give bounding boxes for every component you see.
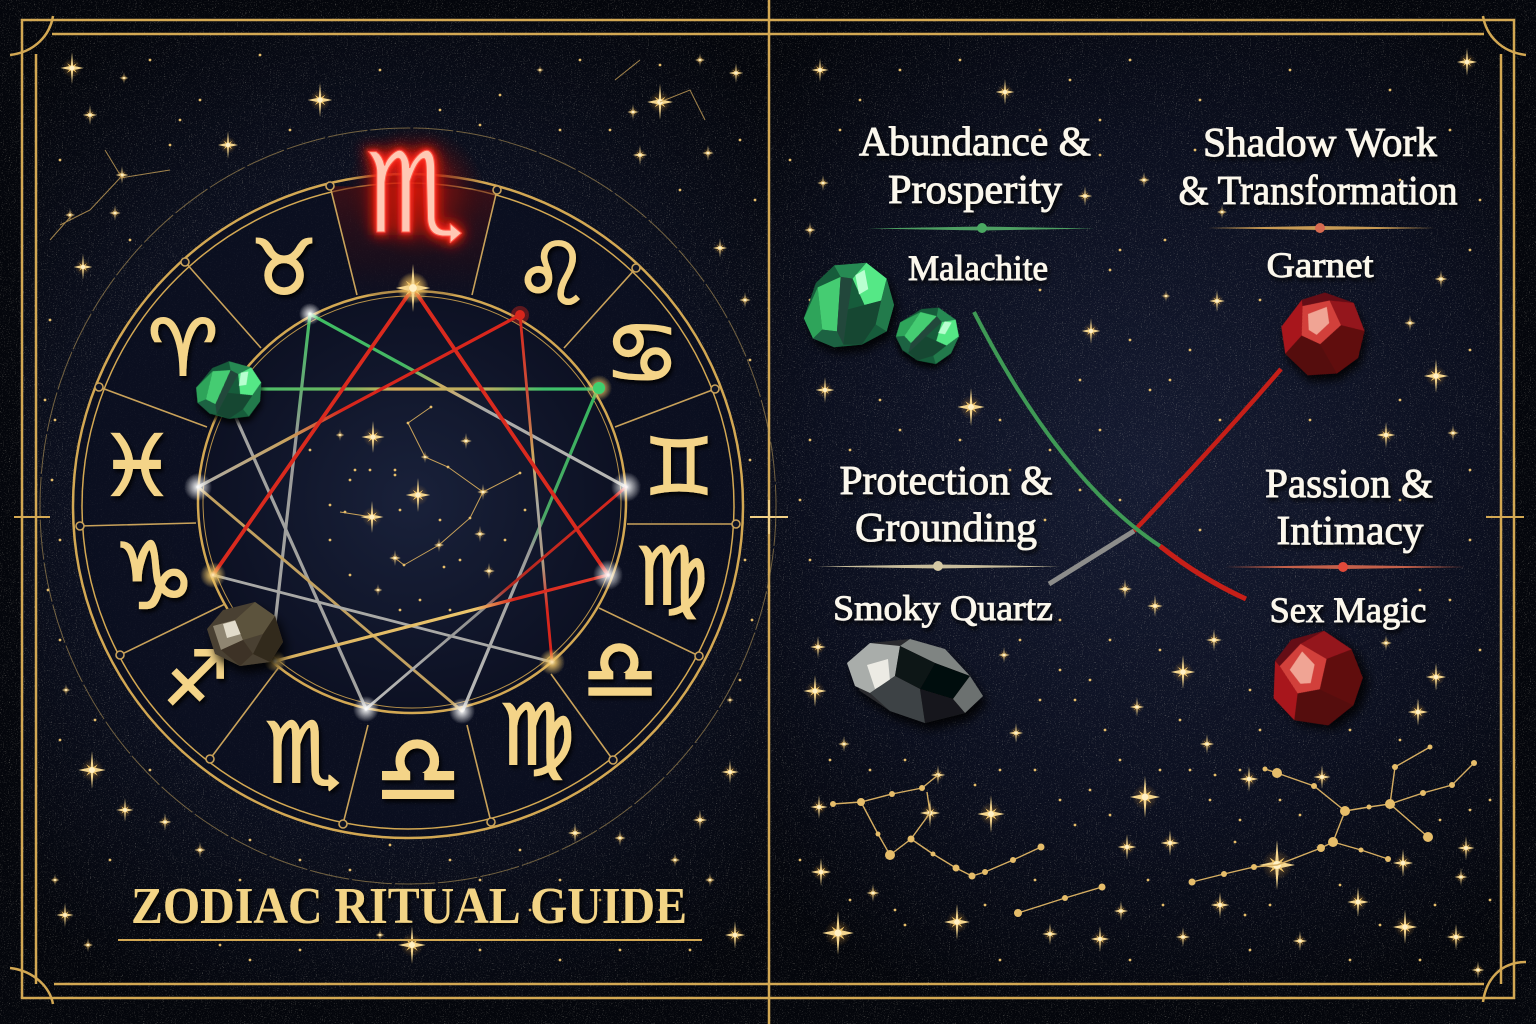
icon: smoky quartz xyxy=(847,639,983,723)
outer faint ring xyxy=(40,128,776,884)
star polygon lines xyxy=(198,288,626,711)
heading: & Transformation xyxy=(1178,167,1458,213)
heading: Intimacy xyxy=(1276,507,1424,553)
icon: garnet xyxy=(1274,286,1370,384)
constellations: right panel xyxy=(833,747,1474,913)
Aries: ♈︎ xyxy=(148,304,218,394)
stone name: Malachite xyxy=(908,248,1048,288)
Libra: ♎︎ xyxy=(375,714,461,826)
stone name: Sex Magic xyxy=(1270,590,1426,630)
highlighted sector xyxy=(330,186,497,295)
panel: Abundance & Prosperity xyxy=(804,118,1095,375)
icon: red stone xyxy=(1254,618,1376,741)
Leo: ♌︎ xyxy=(513,225,591,325)
star field: left panel xyxy=(51,52,751,964)
Virgo: ♍︎ xyxy=(636,530,708,623)
heading: Abundance & xyxy=(859,118,1091,164)
star field: right panel xyxy=(803,48,1484,979)
divider xyxy=(867,223,1095,233)
sector dividers xyxy=(76,182,740,828)
Pisces: ♓︎ xyxy=(99,417,175,515)
stone name: Garnet xyxy=(1266,245,1374,285)
Taurus: ♉︎ xyxy=(250,223,318,312)
constellations: left panel xyxy=(50,60,705,240)
Cancer: ♋︎ xyxy=(604,304,680,402)
stone name: Smoky Quartz xyxy=(833,588,1053,628)
wheel rings xyxy=(73,174,743,838)
icon: malachite large xyxy=(804,263,894,347)
Libra: ♎︎ xyxy=(582,621,658,719)
Sagittarius: ♐︎ xyxy=(163,636,229,722)
sector glow xyxy=(345,126,485,258)
node points xyxy=(184,264,641,724)
glowing Scorpio: ♏︎ xyxy=(365,129,465,259)
heading: Grounding xyxy=(855,504,1037,550)
heading: Prosperity xyxy=(888,166,1063,212)
divider xyxy=(1225,562,1465,572)
zodiac wheel xyxy=(40,126,776,884)
edge sparkles xyxy=(14,500,1524,534)
divider xyxy=(816,561,1060,571)
glowing Scorpio: ♏︎ xyxy=(365,129,465,259)
panel: Shadow Work & Transformation xyxy=(1178,119,1458,384)
title: ZODIAC RITUAL GUIDE xyxy=(131,878,687,935)
heading: Passion & xyxy=(1265,460,1433,506)
constellation nodes xyxy=(830,744,1477,917)
Scorpio: ♏︎ xyxy=(265,704,341,802)
glowing Scorpio: ♏︎ xyxy=(365,129,465,259)
malachite on wheel xyxy=(189,352,270,428)
central constellation xyxy=(310,407,525,610)
divider xyxy=(1207,223,1435,233)
heading: Shadow Work xyxy=(1203,119,1438,165)
Gemini: ♊︎ xyxy=(644,423,714,513)
zodiac glyphs xyxy=(99,223,714,826)
heading: Protection & xyxy=(840,457,1053,503)
smoky stone on wheel xyxy=(207,602,283,666)
panel: Passion & Intimacy xyxy=(1225,460,1465,741)
connector lines xyxy=(974,312,1281,599)
panel: Protection & Grounding xyxy=(816,457,1060,723)
Virgo: ♍︎ xyxy=(499,686,575,784)
Capricorn: ♑︎ xyxy=(113,523,195,630)
icon: malachite small xyxy=(887,293,969,375)
